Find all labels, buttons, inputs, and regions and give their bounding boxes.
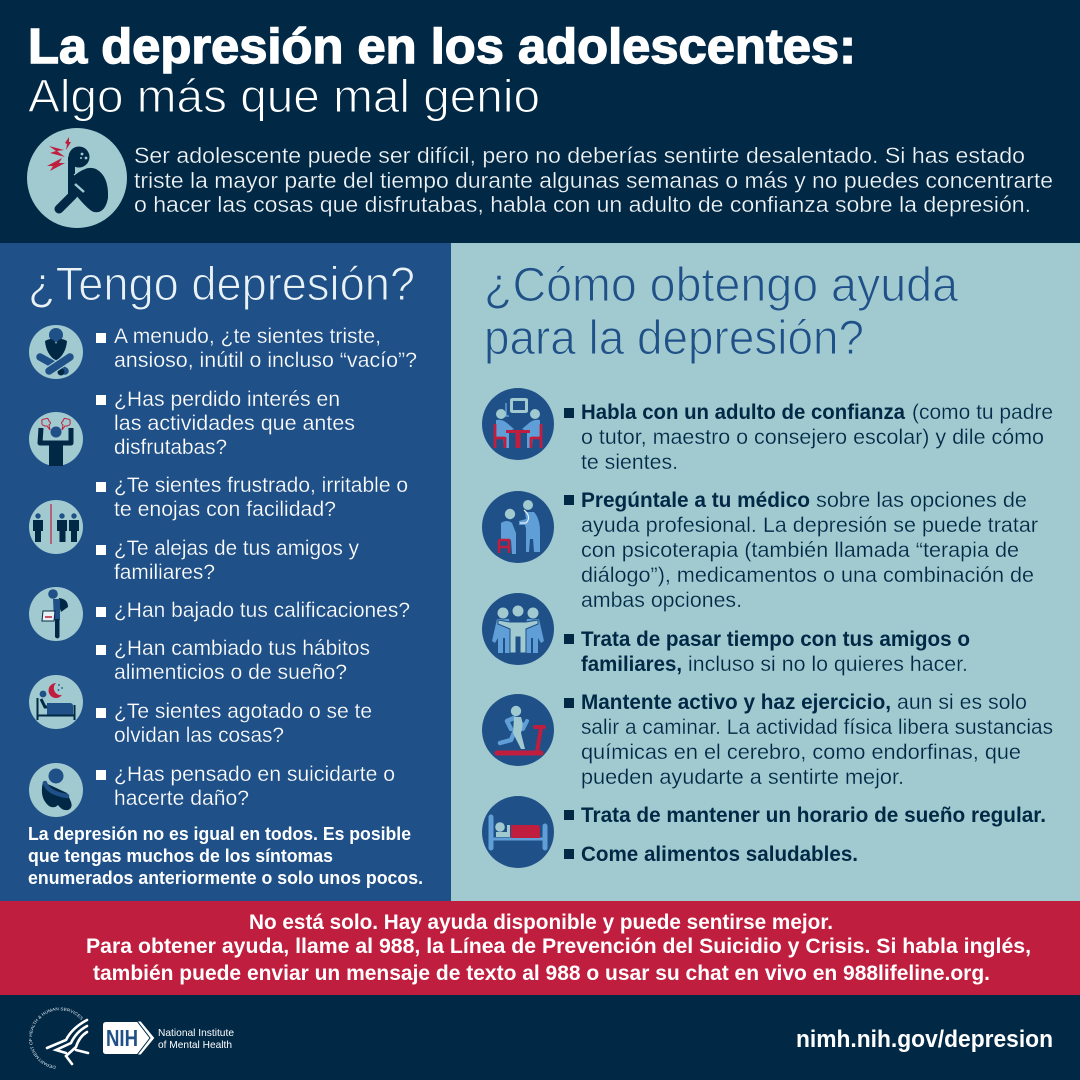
symptom list: ansioso, inútil o incluso “vacío”? xyxy=(114,349,417,372)
heading: ¿Cómo obtengo ayuda para la depresión?: para la depresión? xyxy=(484,312,864,365)
icon: sitting with head in arms xyxy=(29,325,83,379)
symptom list: ¿Has perdido interés en xyxy=(114,388,340,411)
panel: help banner xyxy=(0,901,1080,995)
intro text: Ser adolescente puede ser difícil, pero no deberías sentirte desalentado. Si has estado xyxy=(134,143,1025,168)
intro text: o hacer las cosas que disfrutabas, habla con un adulto de confianza sobre la depresión. xyxy=(134,192,1031,217)
advice list: diálogo”), medicamentos o una combinación de xyxy=(581,563,1034,587)
symptom list: olvidan las cosas? xyxy=(114,724,284,747)
logo: HHS seal: DEPARTMENT OF HEALTH & HUMAN SERVICES · USA xyxy=(29,1007,83,1069)
advice list: Come alimentos saludables. xyxy=(581,842,858,866)
icon: group of friends xyxy=(482,593,554,665)
symptom list: ¿Han cambiado tus hábitos xyxy=(114,637,370,660)
symptom list: familiares? xyxy=(114,561,215,584)
logo: NIH: NIH xyxy=(106,1025,138,1051)
intro text xyxy=(134,143,1053,217)
logo: HHS seal xyxy=(29,1007,90,1069)
advice list: Trata de mantener un horario de sueño regular. xyxy=(581,803,1046,827)
symptom list: A menudo, ¿te sientes triste, xyxy=(114,325,381,348)
symptom list: alimenticios o de sueño? xyxy=(114,661,347,684)
advice list: químicas en el cerebro, como endorfinas, que xyxy=(581,740,1021,764)
advice list: Trata de pasar tiempo con tus amigos o xyxy=(581,627,970,651)
symptom list: ¿Te alejas de tus amigos y xyxy=(114,537,359,560)
logo: NIH: National Institute xyxy=(158,1027,234,1039)
icon: awake in bed at night xyxy=(29,675,83,729)
panel: help banner: también puede enviar un mensaje de texto al 988 o usar su chat en vivo en 988lifeline.org. xyxy=(93,962,990,985)
advice list: con psicoterapia (también llamada “terapia de xyxy=(581,538,1019,562)
advice list: salir a caminar. La actividad física libera sustancias xyxy=(581,715,1053,739)
symptom list: ¿Has pensado en suicidarte o xyxy=(114,763,395,786)
note: depression differs: que tengas muchos de los síntomas xyxy=(28,845,333,866)
icon: running on treadmill xyxy=(482,694,554,766)
advice list: ambas opciones. xyxy=(581,588,742,612)
intro text: triste la mayor parte del tiempo durante algunas semanas o más y no puedes concentrarte xyxy=(134,168,1053,193)
link: website: nimh.nih.gov/depresion xyxy=(796,1026,1053,1053)
advice list xyxy=(564,400,1053,866)
symptom list: te enojas con facilidad? xyxy=(114,498,336,521)
panel: header xyxy=(27,20,1053,228)
advice list: Mantente activo y haz ejercicio, xyxy=(581,690,891,714)
advice list: familiares, xyxy=(581,652,682,676)
icon: student with bad grades xyxy=(29,587,83,641)
symptom list: ¿Te sientes frustrado, irritable o xyxy=(114,474,408,497)
advice list: (como tu padre xyxy=(912,400,1053,424)
advice list: Habla con un adulto de confianza xyxy=(581,400,906,424)
advice list: te sientes. xyxy=(581,450,678,474)
note: depression differs: enumerados anteriormente o solo unos pocos. xyxy=(28,867,423,888)
symptom list: ¿Han bajado tus calificaciones? xyxy=(114,599,410,622)
title xyxy=(28,20,856,122)
icon: frustrated person xyxy=(29,412,83,466)
heading: ¿Cómo obtengo ayuda para la depresión? xyxy=(484,259,958,365)
symptom list: ¿Te sientes agotado o se te xyxy=(114,700,372,723)
advice list: sobre las opciones de xyxy=(816,488,1027,512)
logo: NIH: of Mental Health xyxy=(158,1039,232,1051)
icon: distressed teen xyxy=(27,128,127,228)
advice list: incluso si no lo quieres hacer. xyxy=(688,652,968,676)
panel: ¿Cómo obtengo ayuda? xyxy=(451,243,1080,901)
title: La depresión en los adolescentes: xyxy=(28,20,856,74)
symptom list: disfrutabas? xyxy=(114,436,227,459)
symptom list: las actividades que antes xyxy=(114,412,355,435)
advice list: pueden ayudarte a sentirte mejor. xyxy=(581,765,904,789)
heading: ¿Cómo obtengo ayuda para la depresión?: ¿Cómo obtengo ayuda xyxy=(484,259,958,312)
panel: help banner: Para obtener ayuda, llame al 988, la Línea de Prevención del Suicidio y Crisis. Si habla inglés, xyxy=(86,935,1031,958)
advice list: o tutor, maestro o consejero escolar) y dile cómo xyxy=(581,425,1044,449)
icon: sleeping in bed xyxy=(482,796,554,868)
symptom list xyxy=(96,325,417,810)
icon: doctor with patient xyxy=(482,491,554,563)
title: Algo más que mal genio xyxy=(28,70,540,122)
advice list: aun si es solo xyxy=(897,690,1027,714)
note: depression differs xyxy=(28,823,423,888)
panel: help banner: No está solo. Hay ayuda disponible y puede sentirse mejor. xyxy=(249,911,833,934)
advice list: ayuda profesional. La depresión se puede tratar xyxy=(581,513,1038,537)
icon: talking with trusted adult xyxy=(482,388,554,460)
panel: ¿Tengo depresión? xyxy=(0,243,451,901)
heading: ¿Tengo depresión?: ¿Tengo depresión? xyxy=(28,257,415,310)
logo: NIH xyxy=(103,1021,234,1055)
symptom list: hacerte daño? xyxy=(114,787,249,810)
icon: hunched person xyxy=(29,763,83,817)
advice list: Pregúntale a tu médico xyxy=(581,488,810,512)
icon: withdrawn person apart from others xyxy=(29,500,83,554)
note: depression differs: La depresión no es igual en todos. Es posible xyxy=(28,823,411,844)
